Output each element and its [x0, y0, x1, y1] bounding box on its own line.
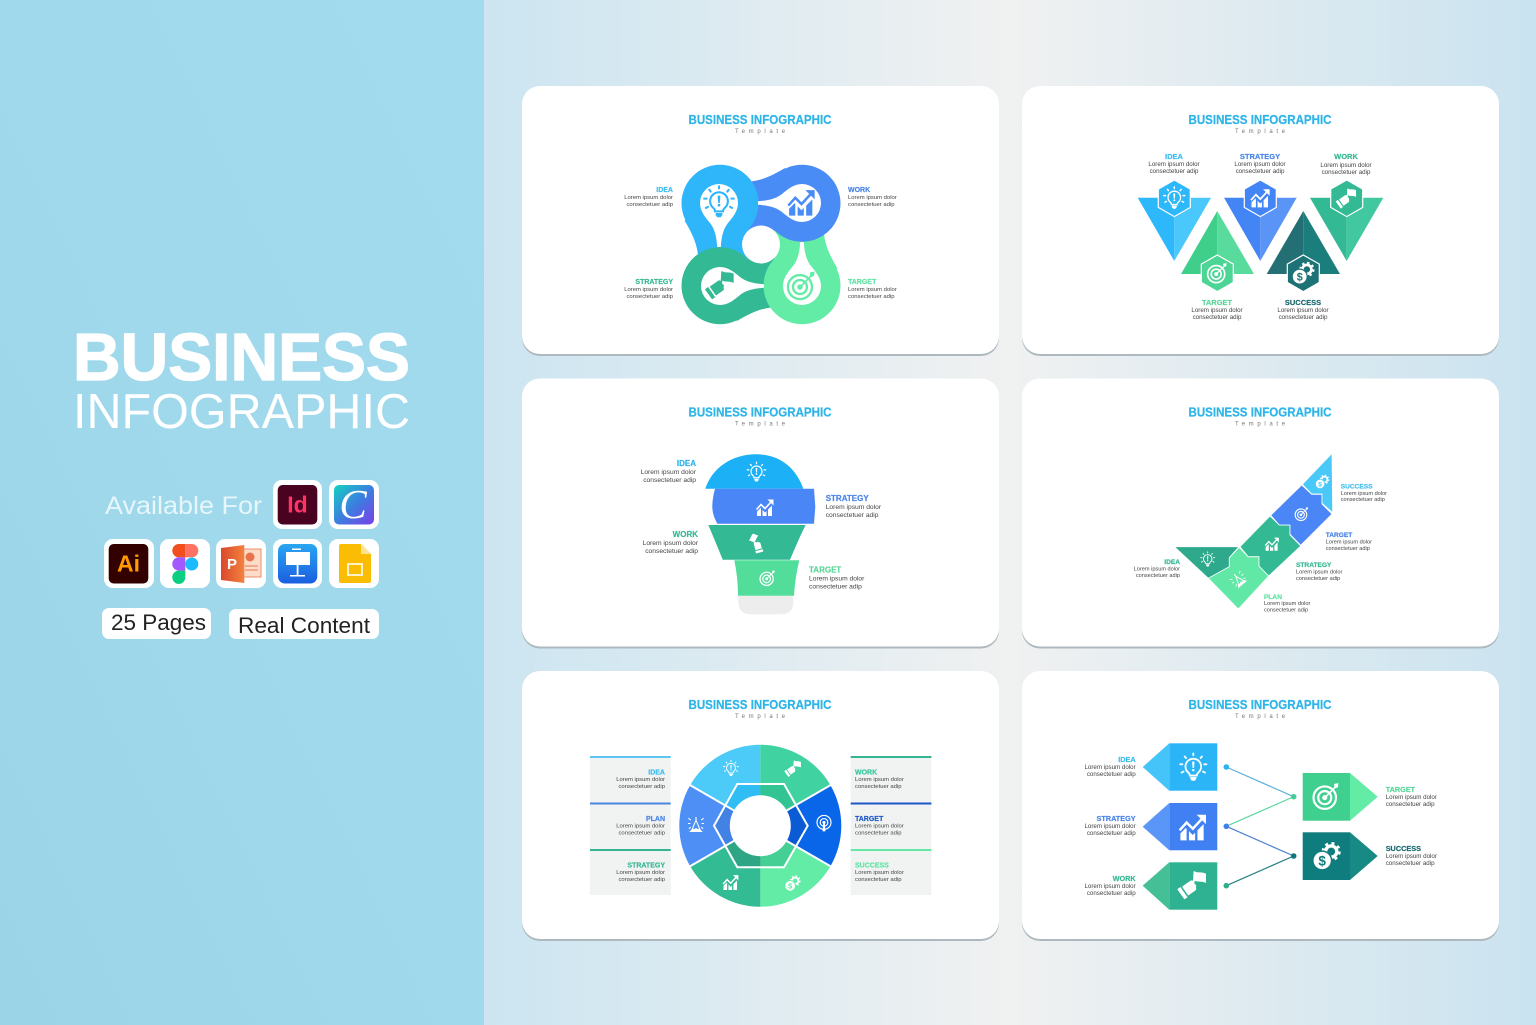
- label: work: WORK: [673, 530, 698, 539]
- label: strategy: STRATEGY: [1296, 562, 1332, 569]
- left blue panel: [0, 0, 484, 1025]
- label: work: WORK: [1113, 874, 1136, 883]
- label: success: SUCCESS: [1386, 844, 1421, 853]
- info box: work: Lorem ipsum dolor: [855, 777, 904, 783]
- card 6 heading: BUSINESS INFOGRAPHIC: [1188, 698, 1332, 712]
- info box: plan: PLAN: [646, 816, 665, 823]
- card 6 heading: [1188, 698, 1332, 720]
- card 4 heading: Template: [1235, 422, 1286, 428]
- icon: Keynote: [273, 539, 322, 588]
- label: work: consectetuer adip: [1087, 890, 1136, 897]
- card 1 heading: [688, 113, 832, 135]
- label: target: consectetuer adip: [1326, 546, 1370, 552]
- label: success: Lorem ipsum dolor: [1341, 491, 1387, 497]
- card 3: light bulb: [522, 378, 999, 648]
- right background: [484, 0, 1536, 1025]
- label: strategy: STRATEGY: [635, 279, 673, 286]
- label: idea: Lorem ipsum dolor: [641, 469, 697, 476]
- label: idea: IDEA: [677, 459, 696, 468]
- icon: Illustrator: [104, 539, 154, 588]
- label: strategy: [624, 279, 674, 300]
- label: idea: [1148, 152, 1200, 175]
- label: success: Lorem ipsum dolor: [1386, 853, 1437, 860]
- card 6: arrows and connectors: [1022, 671, 1499, 941]
- arrow: target: [1303, 773, 1378, 821]
- triangle: work: [1310, 180, 1383, 261]
- label: idea: consectetuer adip: [1087, 771, 1136, 778]
- card 6 heading: Template: [1235, 714, 1286, 720]
- checkmark diagram: [1174, 453, 1333, 609]
- info box: idea: Lorem ipsum dolor: [616, 777, 665, 783]
- label: strategy: consectetuer adip: [826, 512, 879, 519]
- info box: idea: consectetuer adip: [618, 784, 666, 790]
- label: work: Lorem ipsum dolor: [848, 195, 897, 201]
- label: idea: Lorem ipsum dolor: [1084, 764, 1136, 771]
- card 1 heading: Template: [735, 129, 786, 135]
- card 2 heading: Template: [1235, 129, 1286, 135]
- label: success: SUCCESS: [1285, 298, 1321, 307]
- label: success: consectetuer adip: [1279, 314, 1328, 321]
- label: strategy: Lorem ipsum dolor: [826, 504, 882, 511]
- main title: INFOGRAPHIC: [73, 385, 410, 439]
- label: target: consectetuer adip: [1193, 314, 1242, 321]
- label: target: [809, 566, 865, 590]
- info box: plan: consectetuer adip: [618, 830, 666, 836]
- label: idea: Lorem ipsum dolor: [1148, 161, 1200, 168]
- icon: Canva: [329, 480, 379, 529]
- label: strategy: Lorem ipsum dolor: [624, 287, 673, 293]
- arrow: strategy: [1143, 803, 1217, 850]
- info box: target: [851, 802, 931, 849]
- label: idea: consectetuer adip: [1150, 168, 1199, 175]
- card 2: triangles: [1022, 86, 1499, 356]
- label: target: TARGET: [1326, 532, 1352, 539]
- label: work: Lorem ipsum dolor: [643, 540, 699, 547]
- label: work: [848, 187, 897, 208]
- label: idea: Lorem ipsum dolor: [624, 195, 673, 201]
- label: target: TARGET: [809, 566, 841, 574]
- badge: 25 pages: 25 Pages: [111, 610, 206, 635]
- label: strategy: consectetuer adip: [1236, 168, 1285, 175]
- card 2 heading: BUSINESS INFOGRAPHIC: [1188, 113, 1332, 127]
- info box: work: [851, 756, 931, 803]
- label: plan: Lorem ipsum dolor: [1264, 601, 1310, 607]
- label: target: TARGET: [848, 279, 877, 286]
- label: idea: [1084, 755, 1136, 778]
- label: success: consectetuer adip: [1386, 860, 1435, 867]
- label: target: TARGET: [1386, 785, 1416, 794]
- label: strategy: Lorem ipsum dolor: [1296, 570, 1342, 576]
- card 5 heading: [688, 698, 832, 720]
- info box: strategy: [590, 849, 671, 895]
- info box: strategy: STRATEGY: [627, 862, 665, 870]
- label: strategy: Lorem ipsum dolor: [1234, 161, 1286, 168]
- label: target: [1326, 532, 1372, 552]
- card 3 heading: Template: [735, 422, 786, 428]
- label: target: Lorem ipsum dolor: [1326, 540, 1372, 546]
- info box: target: consectetuer adip: [855, 830, 902, 836]
- icon: Illustrator: Ai: [117, 550, 140, 576]
- donut chart: [679, 745, 841, 907]
- info box: success: SUCCESS: [855, 862, 889, 870]
- main title: [73, 320, 410, 439]
- card 5: donut: [522, 671, 999, 941]
- card 4 heading: [1188, 406, 1332, 428]
- label: idea: IDEA: [1118, 755, 1136, 764]
- label: target: consectetuer adip: [809, 584, 862, 590]
- label: idea: IDEA: [656, 187, 673, 194]
- label: work: [643, 530, 699, 555]
- label: success: consectetuer adip: [1341, 497, 1385, 503]
- label: strategy: [1084, 814, 1136, 837]
- label: idea: Lorem ipsum dolor: [1134, 566, 1180, 572]
- icon: PowerPoint: P: [227, 556, 237, 573]
- card 5 heading: Template: [735, 714, 786, 720]
- label: strategy: STRATEGY: [826, 494, 869, 503]
- triangle: target: [1181, 211, 1254, 292]
- label: target: consectetuer adip: [1386, 801, 1435, 808]
- card 1: connected circles: [522, 86, 999, 356]
- arrow: work: [1143, 862, 1217, 910]
- label: work: consectetuer adip: [1322, 169, 1371, 176]
- label: idea: [641, 459, 697, 484]
- triangle: idea: [1138, 180, 1211, 261]
- info box: target: Lorem ipsum dolor: [855, 824, 904, 830]
- label: work: consectetuer adip: [645, 548, 698, 555]
- label: target: [848, 279, 897, 300]
- connector lines: [1224, 764, 1296, 888]
- label: success: [1386, 844, 1437, 867]
- label: target: Lorem ipsum dolor: [848, 287, 897, 293]
- label: strategy: [1296, 562, 1342, 582]
- info box: success: consectetuer adip: [855, 877, 902, 883]
- label: plan: consectetuer adip: [1264, 608, 1308, 614]
- label: strategy: [1234, 152, 1286, 175]
- info box: plan: [590, 802, 671, 849]
- label: idea: consectetuer adip: [626, 202, 674, 208]
- info box: idea: [590, 756, 671, 803]
- card 3 heading: [688, 406, 832, 428]
- label: idea: consectetuer adip: [1136, 573, 1180, 579]
- available for label: Available For: [105, 492, 262, 520]
- label: target: [1191, 298, 1243, 321]
- triangle: strategy: [1224, 180, 1297, 261]
- label: work: WORK: [1334, 152, 1358, 161]
- card 1 heading: BUSINESS INFOGRAPHIC: [688, 113, 832, 127]
- label: work: Lorem ipsum dolor: [1084, 883, 1136, 890]
- label: success: [1341, 484, 1387, 503]
- label: idea: IDEA: [1165, 152, 1184, 161]
- card 4: checkmark puzzle: [1022, 378, 1499, 648]
- bulb diagram: [705, 454, 815, 614]
- label: strategy: STRATEGY: [1240, 152, 1280, 161]
- label: plan: PLAN: [1264, 594, 1282, 601]
- arrow: success: [1303, 832, 1378, 880]
- label: idea: IDEA: [1164, 559, 1180, 566]
- card 2 heading: [1188, 113, 1332, 135]
- card 4 heading: BUSINESS INFOGRAPHIC: [1188, 406, 1332, 420]
- info box: plan: Lorem ipsum dolor: [616, 824, 665, 830]
- arrow: idea: [1143, 743, 1217, 791]
- info box: idea: IDEA: [648, 770, 665, 776]
- pinwheel diagram: [682, 165, 840, 324]
- info box: success: Lorem ipsum dolor: [855, 870, 904, 876]
- label: target: [1386, 785, 1437, 808]
- icon: PowerPoint: [216, 539, 266, 588]
- info box: work: WORK: [855, 770, 877, 776]
- label: strategy: consectetuer adip: [1296, 576, 1340, 582]
- label: success: SUCCESS: [1341, 484, 1373, 490]
- info box: strategy: consectetuer adip: [618, 877, 666, 883]
- label: idea: [1134, 559, 1180, 579]
- label: work: consectetuer adip: [848, 202, 895, 208]
- label: strategy: [826, 494, 882, 519]
- info box: target: TARGET: [855, 816, 884, 823]
- label: idea: consectetuer adip: [643, 477, 696, 484]
- badge: real content: Real Content: [238, 613, 370, 638]
- label: target: Lorem ipsum dolor: [1386, 794, 1437, 801]
- main title: BUSINESS: [73, 320, 410, 395]
- label: strategy: STRATEGY: [1096, 814, 1136, 823]
- label: success: [1277, 298, 1329, 321]
- label: work: [1084, 874, 1136, 897]
- label: plan: [1264, 594, 1310, 614]
- icon: Figma: [160, 539, 210, 588]
- info box: success: [851, 849, 931, 895]
- label: work: Lorem ipsum dolor: [1320, 162, 1372, 169]
- card 3 heading: BUSINESS INFOGRAPHIC: [688, 406, 832, 420]
- label: target: TARGET: [1202, 298, 1233, 307]
- label: strategy: consectetuer adip: [1087, 830, 1136, 837]
- info box: strategy: Lorem ipsum dolor: [616, 870, 665, 876]
- label: strategy: consectetuer adip: [626, 294, 674, 300]
- card 5 heading: BUSINESS INFOGRAPHIC: [688, 698, 832, 712]
- label: idea: [624, 187, 674, 208]
- label: work: WORK: [848, 187, 870, 194]
- icon: Google Slides: [329, 539, 379, 588]
- label: target: consectetuer adip: [848, 294, 895, 300]
- info box: work: consectetuer adip: [855, 784, 902, 790]
- label: strategy: Lorem ipsum dolor: [1084, 823, 1136, 830]
- label: work: [1320, 152, 1372, 176]
- icon: InDesign: [273, 480, 322, 529]
- label: success: Lorem ipsum dolor: [1277, 307, 1329, 314]
- triangle: success: [1267, 211, 1340, 292]
- icon: Canva: C: [339, 481, 367, 527]
- label: target: Lorem ipsum dolor: [1191, 307, 1243, 314]
- icon: InDesign: Id: [287, 492, 308, 518]
- label: target: Lorem ipsum dolor: [809, 576, 865, 582]
